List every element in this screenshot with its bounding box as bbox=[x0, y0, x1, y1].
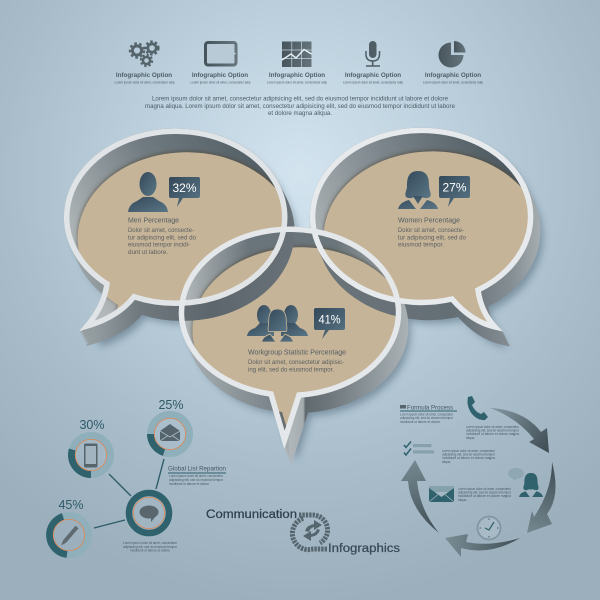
text: global list caption bbox=[169, 474, 224, 486]
intro paragraph: et dolore magna aliqua. bbox=[268, 110, 332, 117]
text: envelope caption: aliqua. bbox=[458, 498, 467, 502]
text: checklist caption: adipisicing elit, sed do eiusmod tempor bbox=[442, 453, 496, 457]
chart: global list repartition network bbox=[50, 398, 226, 554]
option labels: Infographic Option bbox=[425, 72, 481, 79]
option labels: Infographic Option bbox=[116, 72, 172, 79]
donut: 25% bbox=[150, 398, 190, 454]
text: workgroup description bbox=[248, 359, 344, 374]
text: phone caption: aliqua. bbox=[466, 436, 475, 440]
text: centre node caption: adipisicing elit, sed do eiusmod tempor bbox=[123, 545, 178, 549]
text: phone caption bbox=[466, 425, 520, 440]
women percentage block bbox=[398, 171, 470, 248]
icon: line chart bbox=[282, 42, 312, 67]
connector lines bbox=[94, 459, 164, 528]
option captions: Lorem ipsum dolor sit amet, consectetur adip bbox=[190, 80, 251, 84]
donut: 45%: 45% bbox=[58, 498, 84, 512]
icon row: infographic options bbox=[114, 41, 483, 84]
title: communication infographics: Communication bbox=[206, 509, 297, 521]
badge: 32%: 32% bbox=[172, 181, 197, 195]
badge: 27%: 27% bbox=[442, 180, 467, 194]
icon: checklist bbox=[404, 442, 434, 455]
heading: workgroup statistic: Workgroup Statistic Percentage bbox=[248, 348, 346, 356]
text: women description: tur adipiscing elit, sed do bbox=[398, 234, 466, 241]
donut: 30%: 30% bbox=[79, 418, 105, 432]
badge: 41%: 41% bbox=[318, 312, 341, 326]
text: formula caption: adipisicing elit, sed do eiusmod tempor bbox=[400, 416, 454, 420]
text: formula caption: Lorem ipsum dolor sit amet, consectetur bbox=[400, 412, 454, 416]
option labels: Infographic Option bbox=[269, 72, 325, 79]
icon: man bbox=[128, 172, 168, 212]
text: centre node caption bbox=[123, 541, 178, 552]
icon: gears bbox=[130, 42, 158, 66]
arrow: top right bbox=[490, 408, 549, 453]
text: phone caption: Lorem ipsum dolor sit amet, consectetur bbox=[466, 425, 520, 429]
text: women description bbox=[398, 227, 466, 248]
icon: phone bbox=[468, 396, 488, 420]
title: communication infographics: Infographics bbox=[328, 543, 400, 555]
text: checklist caption: aliqua. bbox=[442, 460, 451, 464]
intro paragraph: magna aliqua. Lorem ipsum dolor sit amet, consectetur adipisicing elit, sed do eiusmod tempor incididunt ut labore bbox=[145, 103, 455, 110]
intro paragraph: Lorem ipsum dolor sit amet, consectetur adipisicing elit, sed do eiusmod tempor incididunt ut labore et dolore bbox=[152, 96, 448, 102]
text: envelope caption bbox=[458, 487, 512, 502]
icon: person with speech bubble bbox=[508, 468, 543, 497]
heading: global list repartion: Global List Repartion bbox=[168, 465, 226, 472]
3D extrusion of the speech bubbles bbox=[67, 130, 538, 455]
donut: centre speech bubble bbox=[129, 493, 169, 533]
arrow: bottom bbox=[445, 534, 520, 557]
donut: 30% bbox=[72, 418, 110, 474]
heading: formula process: Formula Process bbox=[407, 404, 453, 411]
option labels bbox=[116, 72, 481, 79]
option captions bbox=[114, 80, 483, 84]
text: checklist caption bbox=[442, 449, 496, 464]
workgroup percentage block bbox=[247, 305, 346, 374]
heading: women percentage: Women Percentage bbox=[398, 216, 460, 224]
option captions: Lorem ipsum dolor sit amet, consectetur adip bbox=[114, 80, 175, 84]
icon: microphone bbox=[366, 41, 380, 66]
text: women description: eiusmod tempor. bbox=[398, 241, 444, 248]
text: envelope caption: incididunt ut labore et dolore magna bbox=[458, 494, 511, 498]
text: formula caption: incididunt ut labore et dolore bbox=[400, 420, 440, 424]
text: men description: tur adipiscing elit, sed do bbox=[128, 234, 196, 241]
diagram: formula process cycle bbox=[400, 396, 556, 557]
icon: workgroup bbox=[247, 305, 308, 342]
icon: dashed cycle arrows bbox=[292, 515, 328, 550]
text: centre node caption: incididunt ut labore et dolore bbox=[130, 548, 170, 552]
text: envelope caption: Lorem ipsum dolor sit amet, consectetur bbox=[458, 487, 512, 491]
icon: woman bbox=[398, 171, 438, 209]
bubble extrusions seen through the workgroup bubble bbox=[184, 245, 396, 321]
text: men description bbox=[128, 227, 196, 256]
text: global list caption: Lorem ipsum dolor sit amet, consectetur bbox=[169, 474, 224, 478]
text: envelope caption: adipisicing elit, sed do eiusmod tempor bbox=[458, 491, 512, 495]
text: checklist caption: incididunt ut labore et dolore magna bbox=[442, 456, 495, 460]
text: phone caption: incididunt ut labore et dolore magna bbox=[466, 432, 519, 436]
option captions: Lorem ipsum dolor sit amet, consectetur adip bbox=[423, 80, 483, 84]
text: centre node caption: Lorem ipsum dolor sit amet, consectetur bbox=[123, 541, 178, 545]
text: women description: Dolor sit amet, consecte- bbox=[398, 227, 464, 234]
text: workgroup description: ing elit, sed do eiusmod tempor. bbox=[248, 366, 334, 374]
bubble rings bbox=[67, 130, 531, 440]
panel: women bubble interior bbox=[315, 134, 528, 322]
text: men description: Dolor sit amet, consecte- bbox=[128, 227, 194, 234]
panel: workgroup bubble interior bbox=[186, 232, 396, 430]
text: men description: eiusmod tempor incidi- bbox=[128, 242, 190, 249]
panel: men bubble interior bbox=[70, 150, 282, 320]
soft shadows under speech bubbles bbox=[72, 136, 543, 461]
arrow: right bbox=[527, 462, 556, 533]
title: communication infographics bbox=[206, 509, 400, 555]
text: men description: dunt ut labore. bbox=[128, 249, 168, 256]
text: workgroup description: Dolor sit amet, consectetur adipisic- bbox=[248, 359, 344, 366]
icon: pie chart bbox=[438, 41, 466, 68]
text: phone caption: adipisicing elit, sed do eiusmod tempor bbox=[466, 429, 520, 433]
icon: envelope bbox=[429, 486, 454, 502]
donut: 25%: 25% bbox=[158, 398, 184, 412]
heading: men percentage: Men Percentage bbox=[128, 216, 179, 224]
text: formula caption bbox=[400, 412, 454, 424]
icon: tablet bbox=[206, 42, 236, 65]
intro paragraph bbox=[145, 96, 455, 117]
option captions: Lorem ipsum dolor sit amet, consectetur adip bbox=[343, 80, 403, 84]
donut: 45% bbox=[50, 498, 88, 554]
option labels: Infographic Option bbox=[192, 72, 248, 79]
arrow: left bbox=[401, 460, 439, 533]
men percentage block bbox=[128, 172, 200, 256]
text: checklist caption: Lorem ipsum dolor sit amet, consectetur bbox=[442, 449, 496, 453]
option labels: Infographic Option bbox=[345, 72, 401, 79]
icon: clock bbox=[478, 516, 500, 540]
text: global list caption: adipisicing elit, sed do eiusmod tempor bbox=[169, 478, 224, 482]
text: global list caption: incididunt ut labore et dolore bbox=[169, 482, 209, 486]
option captions: Lorem ipsum dolor sit amet, consectetur adip bbox=[267, 80, 327, 84]
